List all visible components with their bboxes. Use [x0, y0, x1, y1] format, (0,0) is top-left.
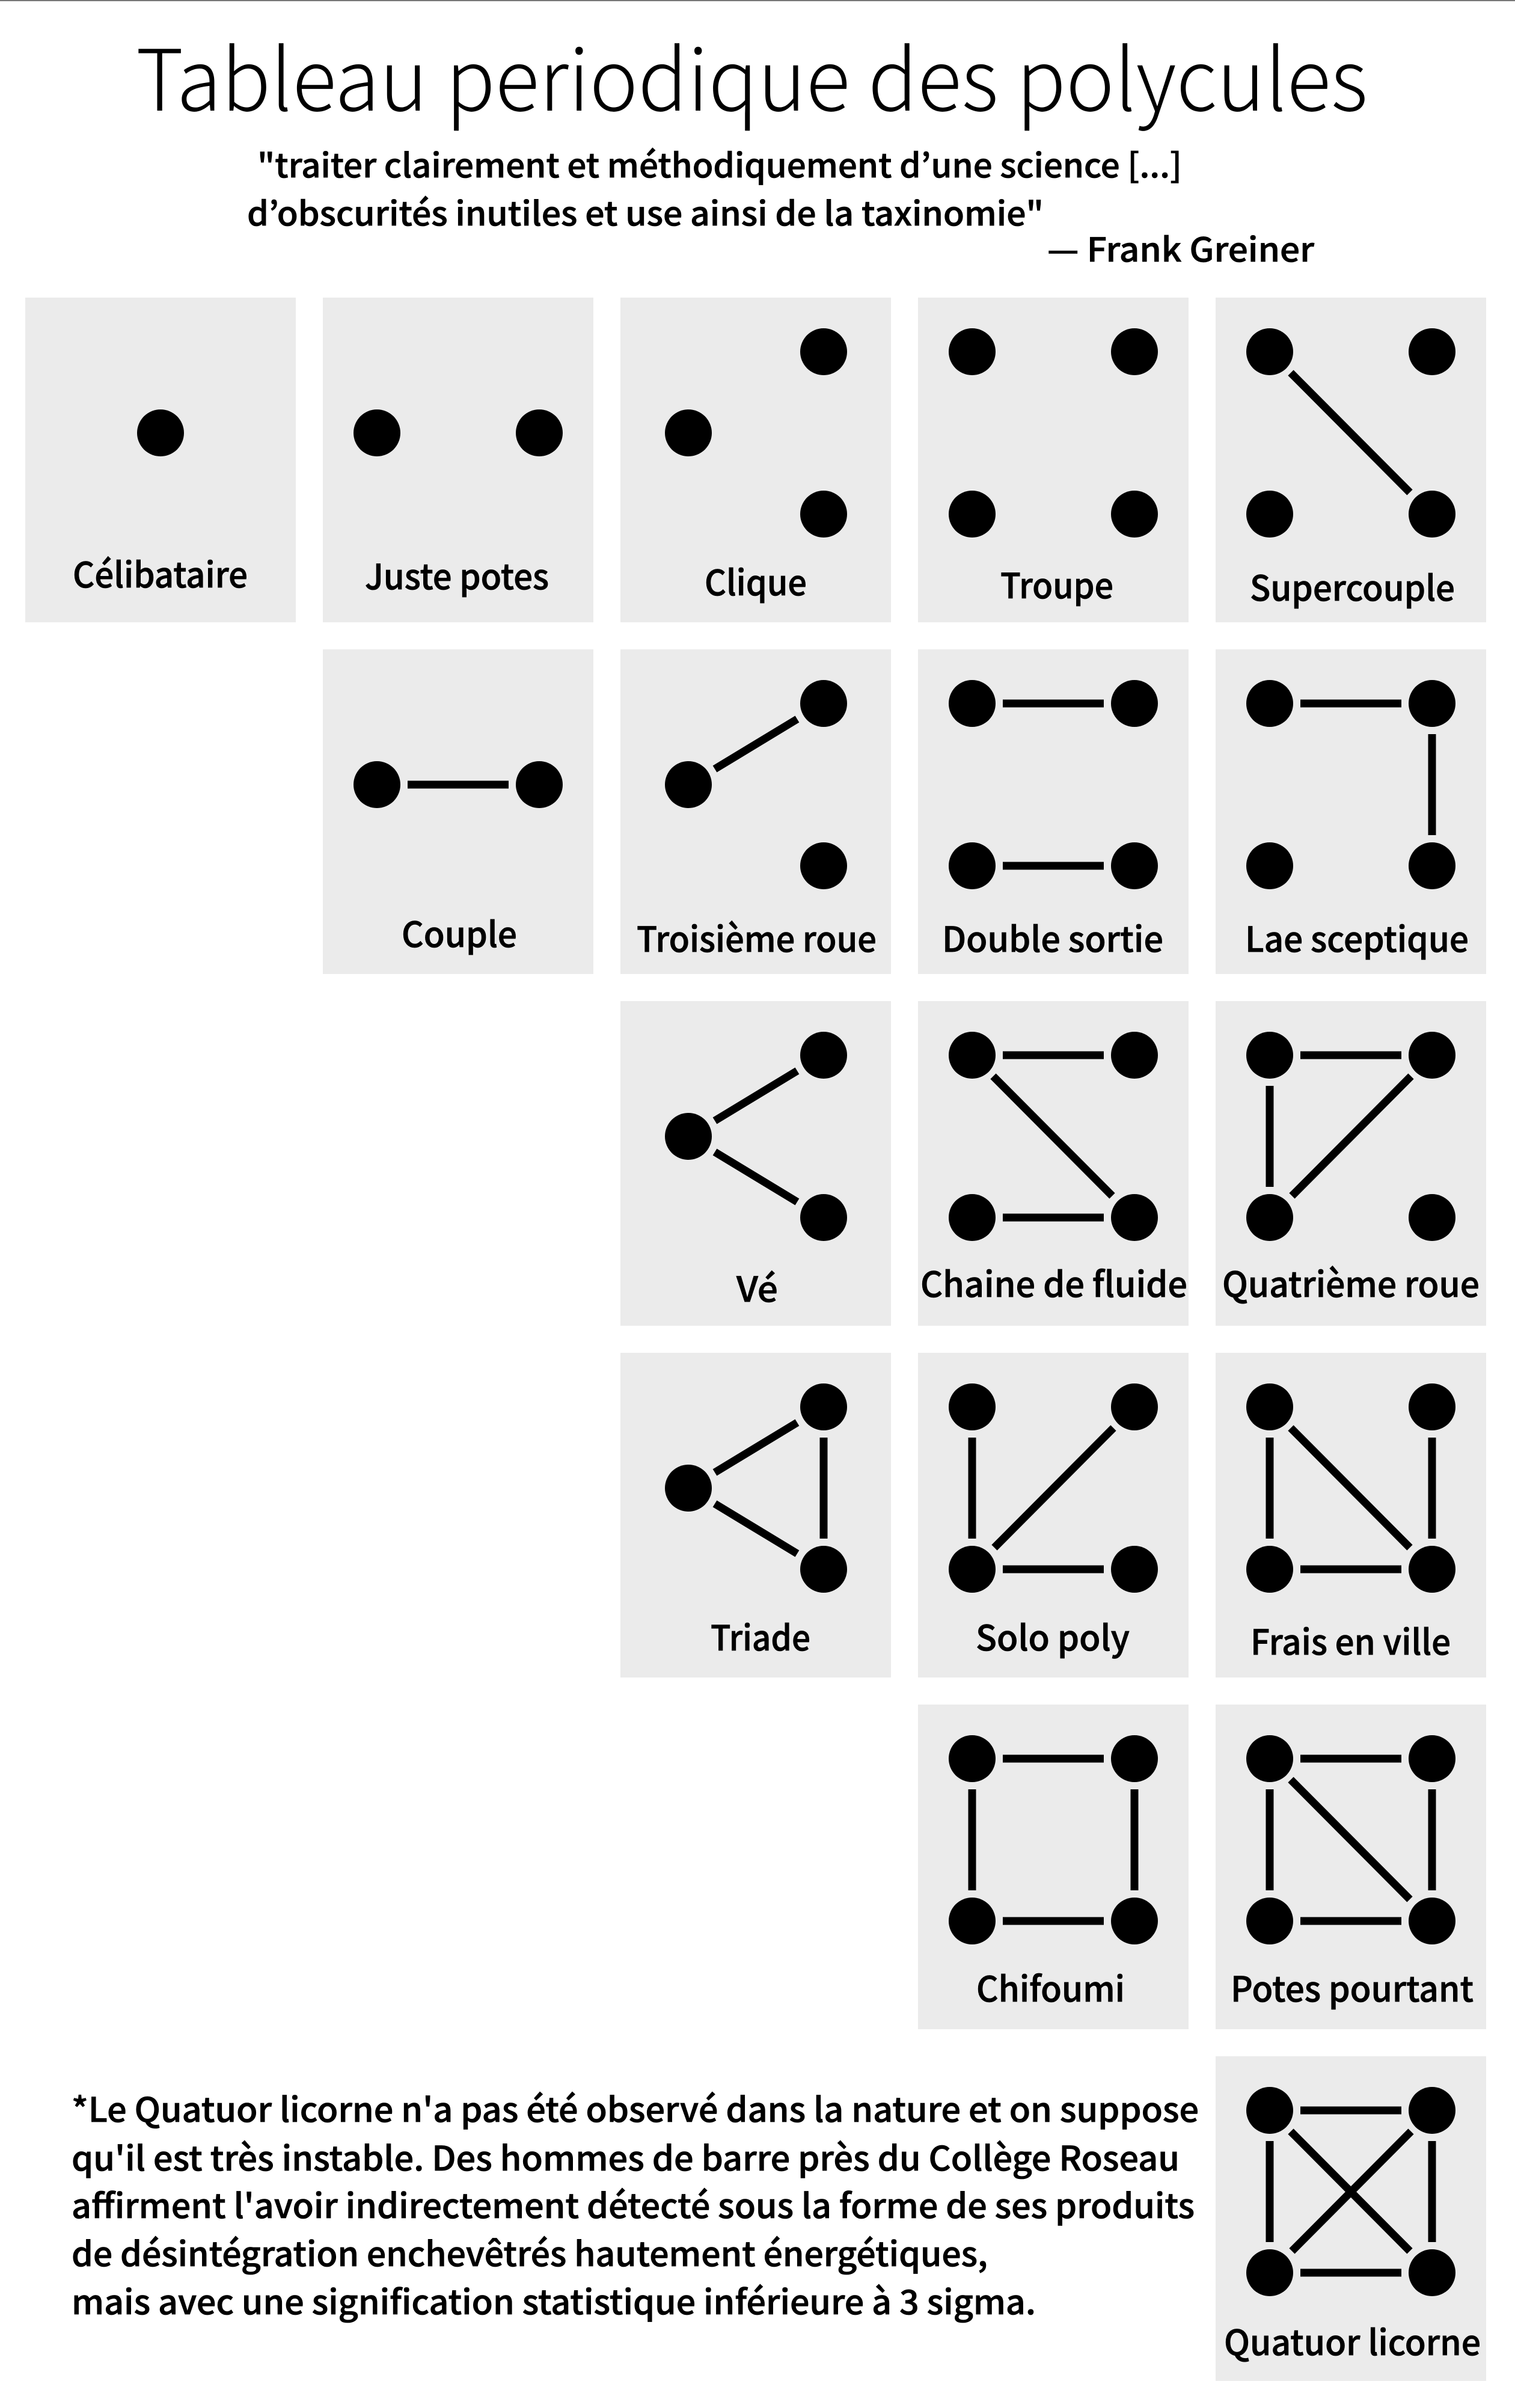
panel: Célibataire: Célibataire	[73, 547, 248, 598]
panel: Supercouple: Supercouple	[1250, 560, 1455, 611]
footnote text: qu'il est très instable. Des hommes de barre près du Collège Roseau	[72, 2132, 1180, 2181]
panel: Quatrième roue: Quatrième roue	[1222, 1257, 1480, 1307]
panel: Double sortie	[918, 649, 1189, 974]
panel: Juste potes: Juste potes	[365, 549, 549, 599]
panel: Chifoumi	[918, 1705, 1189, 2029]
panel: Vé	[620, 1001, 891, 1326]
footnote text: de désintégration enchevêtrés hautement énergétiques,	[72, 2228, 988, 2276]
panel: Lae sceptique: Lae sceptique	[1245, 911, 1469, 962]
panel: Potes pourtant: Potes pourtant	[1231, 1961, 1474, 2012]
panel: Quatuor licorne: Quatuor licorne	[1224, 2315, 1481, 2365]
title: Tableau periodique des polycules	[136, 12, 1368, 135]
panel: Clique	[620, 298, 891, 622]
footnote text: mais avec une signification statistique inférieure à 3 sigma.	[72, 2276, 1036, 2324]
panel: Potes pourtant	[1216, 1705, 1486, 2029]
quote: "traiter clairement et méthodiquement d’une science [...]	[257, 139, 1182, 187]
panel: Triade: Triade	[711, 1610, 810, 1661]
panel: Quatuor licorne	[1216, 2056, 1486, 2381]
quote	[247, 139, 1315, 271]
quote: — Frank Greiner	[1047, 223, 1315, 271]
panel: Supercouple	[1216, 298, 1486, 622]
footnote text: *Le Quatuor licorne n'a pas été observé dans la nature et on suppose	[72, 2083, 1199, 2132]
panel: Chaine de fluide	[918, 1001, 1189, 1326]
panel: Solo poly	[918, 1353, 1189, 1677]
footnote text: affirment l'avoir indirectement détecté sous la forme de ses produits	[72, 2180, 1195, 2228]
footnote text	[72, 2083, 1199, 2324]
panel: Couple: Couple	[402, 907, 517, 957]
panel: Troupe: Troupe	[1000, 558, 1113, 608]
panel: Troisième roue	[620, 649, 891, 974]
panel: Frais en ville	[1216, 1353, 1486, 1677]
panel: Double sortie: Double sortie	[942, 911, 1163, 962]
panel: Troisième roue: Troisième roue	[637, 911, 877, 962]
panel: Chifoumi: Chifoumi	[976, 1961, 1125, 2012]
panel: Chaine de fluide: Chaine de fluide	[920, 1257, 1187, 1307]
panel: Couple	[323, 649, 593, 974]
panel: Quatrième roue	[1216, 1001, 1486, 1326]
panel: Troupe	[918, 298, 1189, 622]
panel: Vé: Vé	[736, 1261, 778, 1312]
panel: Clique: Clique	[705, 555, 807, 605]
panel: Célibataire	[25, 298, 296, 622]
panel: Solo poly: Solo poly	[976, 1610, 1130, 1661]
panel: Frais en ville: Frais en ville	[1250, 1614, 1451, 1665]
panel: Triade	[620, 1353, 891, 1677]
panel: Juste potes	[323, 298, 593, 622]
panel: Lae sceptique	[1216, 649, 1486, 974]
quote: d’obscurités inutiles et use ainsi de la taxinomie"	[247, 187, 1044, 235]
